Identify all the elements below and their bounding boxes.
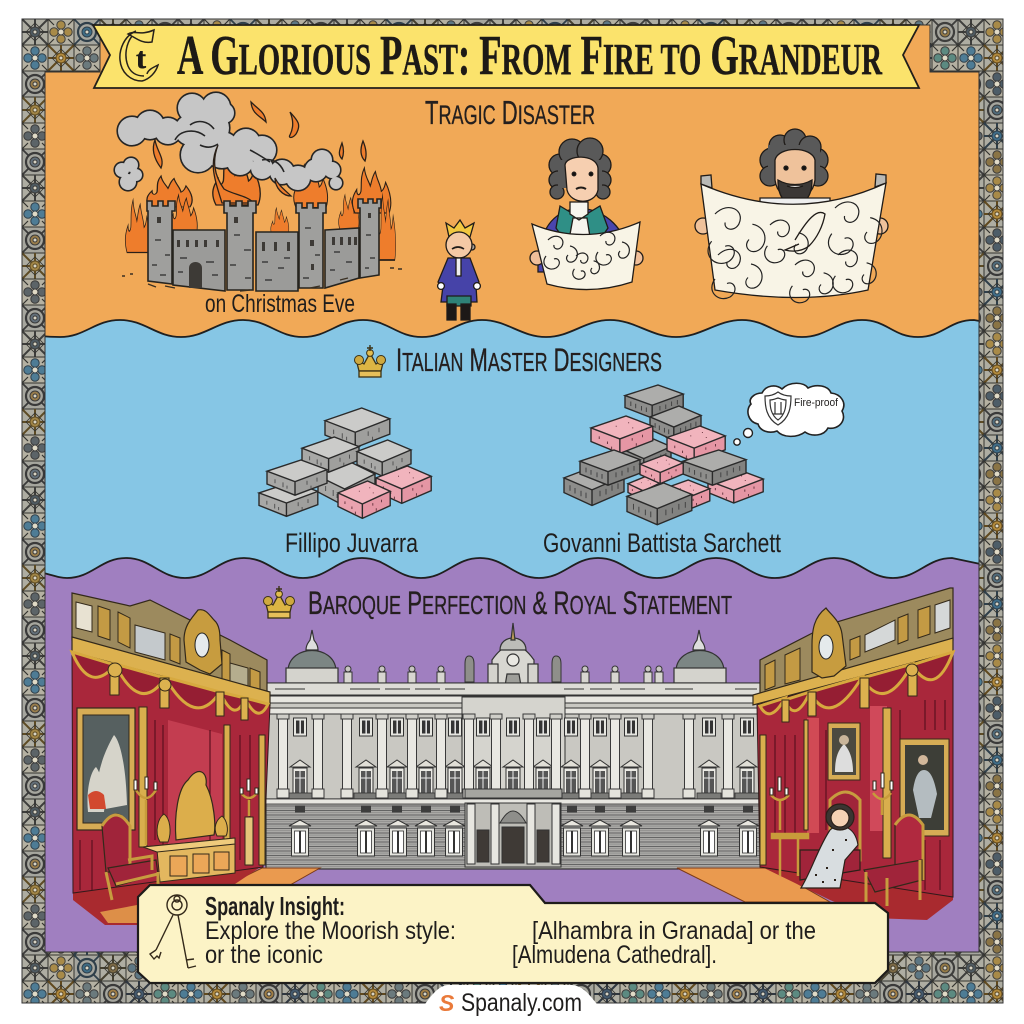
- flame tongues and embers: [153, 102, 366, 203]
- footer site name: Spanaly.com: [461, 989, 582, 1017]
- figure: bearded architect holding large scroll: [695, 129, 888, 303]
- red armchair right: [864, 815, 923, 906]
- gold desk: [143, 838, 235, 882]
- illustration: burning castle: [115, 93, 402, 291]
- left wall vertical folds: [80, 720, 250, 890]
- right gold tassels: [782, 664, 918, 722]
- palace middle windows: [288, 760, 759, 800]
- caption: Fillipo Juvarra: Fillipo Juvarra: [285, 528, 419, 558]
- left alcove: [168, 720, 222, 856]
- right candelabra on table: [770, 777, 808, 876]
- right frieze: [760, 588, 953, 698]
- candelabra left: [134, 777, 157, 845]
- left cornice: [72, 637, 270, 705]
- right wall folds: [775, 700, 945, 890]
- palace upper windows: [294, 718, 754, 736]
- right frieze panels: [865, 600, 950, 652]
- wig hair: [549, 138, 611, 199]
- insight line 2 right: [Almudena Cathedral].: [512, 941, 717, 969]
- palace cornice: [266, 696, 762, 714]
- figure: small king with crown: [438, 220, 480, 320]
- callout: fire-proof thought bubble: [734, 383, 844, 445]
- heading: Italian Master Designers: ITALIAN MASTER DESIGNERS: [396, 342, 662, 378]
- left gold columns: [139, 707, 265, 865]
- illustration: Sarchetti brick pile: [564, 385, 763, 525]
- callout: Spanaly Insight box: [138, 885, 888, 983]
- flames behind the castle: [125, 155, 396, 260]
- icon: ornate drop cap: [120, 30, 158, 81]
- palace balustrade: [266, 683, 762, 695]
- left drapes: [72, 652, 268, 713]
- right cornice: [753, 638, 953, 705]
- palace lower storey: [266, 799, 764, 869]
- wall sconce candles: [873, 773, 893, 815]
- large scroll: [701, 183, 886, 298]
- palace entrance with three doors: [465, 803, 561, 867]
- clock on left frieze: [184, 610, 222, 674]
- left room floor: [73, 866, 262, 925]
- small scroll: [532, 222, 640, 290]
- fire-proof label: Fire-proof: [794, 397, 839, 409]
- icon: crown for Italian designers: [354, 345, 386, 377]
- right gold columns: [760, 708, 891, 865]
- palace statues and finials: [344, 656, 663, 685]
- palace columns: [277, 714, 734, 798]
- illustration: Juvarra brick pile: [259, 408, 431, 518]
- illustration: courtyard floor stripes: [227, 868, 830, 902]
- right room floor: [760, 866, 953, 920]
- insight line 1 right: [Alhambra in Granada] or the: [532, 917, 816, 945]
- palace lower windows: [289, 820, 759, 856]
- left frieze: [72, 593, 267, 700]
- right drapes: [760, 652, 953, 714]
- seated queen on throne: [800, 792, 860, 888]
- illustration: left throne room interior: [72, 593, 270, 925]
- palace upper storey: [266, 683, 762, 801]
- ground scratches: [122, 268, 402, 291]
- castle walls: [173, 228, 359, 291]
- icon: Spanaly S logo: S: [439, 990, 455, 1016]
- panel: blue designers section background: [40, 320, 985, 600]
- caption: on Christmas Eve: on Christmas Eve: [205, 290, 355, 318]
- large portrait: [900, 739, 949, 836]
- title text: A GLORIOUS PAST: FROM FIRE TO GRANDEUR: [177, 25, 883, 87]
- icon: ornate drop cap: t: [136, 42, 146, 75]
- left wall: [72, 652, 270, 893]
- footer logo tab: [0, 985, 1024, 1024]
- right wall: [757, 652, 953, 897]
- illustration: royal palace facade: [266, 623, 764, 869]
- heading: Tragic Disaster: TRAGIC DISASTER: [425, 94, 595, 131]
- icon: crown for baroque section: [264, 586, 294, 618]
- insight line 2 left: or the iconic: [205, 941, 323, 969]
- palace vents: [295, 806, 753, 812]
- panel: purple baroque section background: [40, 558, 985, 960]
- palace domes: [286, 623, 726, 694]
- right alcove column: [807, 718, 819, 833]
- left frieze panels: [76, 602, 260, 696]
- small portrait: [828, 723, 860, 780]
- gold statue on desk: [176, 772, 215, 840]
- candelabra right: [240, 779, 258, 865]
- red throne chair left: [102, 814, 158, 900]
- smoke cloud: [115, 93, 342, 190]
- castle towers: [147, 199, 381, 290]
- insight line 1 left: Explore the Moorish style:: [205, 917, 456, 945]
- icon: shield: [765, 392, 791, 425]
- castle brick marks: [152, 228, 375, 280]
- gold urns: [157, 814, 227, 842]
- illustration: right throne room interior: [753, 588, 953, 920]
- palace central balcony: [465, 789, 562, 798]
- insight heading: Spanaly Insight:: [205, 891, 345, 921]
- painting on left wall: [77, 708, 135, 830]
- figure: architect holding small scroll: [530, 138, 643, 290]
- title banner: [93, 25, 919, 88]
- left gold tassels: [108, 663, 248, 720]
- heading: Baroque Perfection and Royal Statement: BAROQUE PERFECTION & ROYAL STATEMENT: [308, 585, 732, 621]
- castle gate and windows: [157, 213, 371, 288]
- palace central bay: [462, 697, 565, 800]
- caption: Govanni Battista Sarchett: Govanni Battista Sarchett: [543, 528, 781, 558]
- clock on right frieze: [812, 608, 846, 678]
- icon: two keys: [150, 895, 196, 968]
- panel: orange fire section background: [40, 20, 985, 350]
